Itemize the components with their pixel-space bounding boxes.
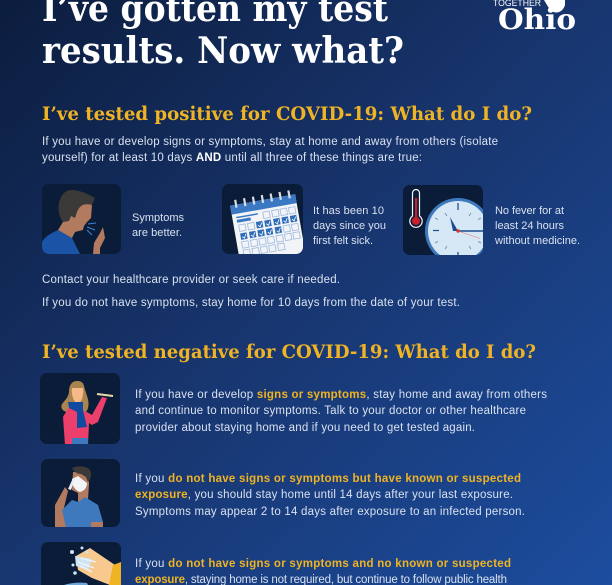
text: negative, signs or symptoms: provider about staying home and if you need to get tested again. <box>135 422 475 434</box>
text: negative, signs or symptoms: If you have or develop signs or symptoms, stay home and away from others <box>135 389 547 401</box>
heading: tested positive: I’ve tested positive for COVID-19: What do I do? <box>42 103 532 125</box>
intro text: positive: yourself) for at least 10 days AND until all three of these things are true: <box>42 152 422 164</box>
icon: woman with thermometer <box>40 373 120 445</box>
text: negative, no exposure: If you do not have signs or symptoms and no known or suspected <box>135 558 511 570</box>
icon: washing hands <box>41 542 121 585</box>
text: negative, known exposure: exposure, you should stay home until 14 days after your last exposure. <box>135 489 513 501</box>
label: no fever: No fever for at <box>495 205 564 217</box>
label: ten days <box>313 205 386 247</box>
label: ten days: days since you <box>313 220 386 232</box>
label: ten days: first felt sick. <box>313 235 373 247</box>
heading: tested negative: I’ve tested negative for COVID-19: What do I do? <box>42 341 536 363</box>
title <box>42 0 404 72</box>
text: negative, known exposure: Symptoms may appear 2 to 14 days after exposure to an infected person. <box>135 506 525 518</box>
text: negative, known exposure: If you do not have signs or symptoms but have known or suspected <box>135 473 521 485</box>
icon: man with mask <box>41 459 120 527</box>
label: no fever <box>494 205 580 247</box>
label: symptoms better: Symptoms <box>132 212 184 224</box>
icon: person coughing <box>42 184 121 254</box>
label: symptoms better <box>132 212 184 239</box>
title: results. Now what? <box>42 30 404 72</box>
icon: calendar <box>222 184 303 254</box>
text: negative, signs or symptoms: and continue to monitor symptoms. Talk to your doctor or other healthcare <box>135 405 526 417</box>
label: ten days: It has been 10 <box>313 205 384 217</box>
label: symptoms better: are better. <box>132 227 182 239</box>
logo: Together Ohio: Ohio <box>498 3 576 36</box>
icon: thermometer and clock <box>403 185 483 255</box>
label: no fever: least 24 hours <box>495 220 564 232</box>
label: no fever: without medicine. <box>494 235 580 247</box>
text: contact provider: Contact your healthcare provider or seek care if needed. <box>42 274 340 286</box>
text: negative, no exposure <box>135 558 511 585</box>
text: negative, known exposure <box>135 473 525 518</box>
text: negative, signs or symptoms <box>135 389 547 434</box>
intro text: positive <box>42 136 498 164</box>
intro text: positive: If you have or develop signs or symptoms, stay at home and away from others (isolate <box>42 136 498 148</box>
text: no symptoms: If you do not have symptoms, stay home for 10 days from the date of your test. <box>42 297 460 309</box>
